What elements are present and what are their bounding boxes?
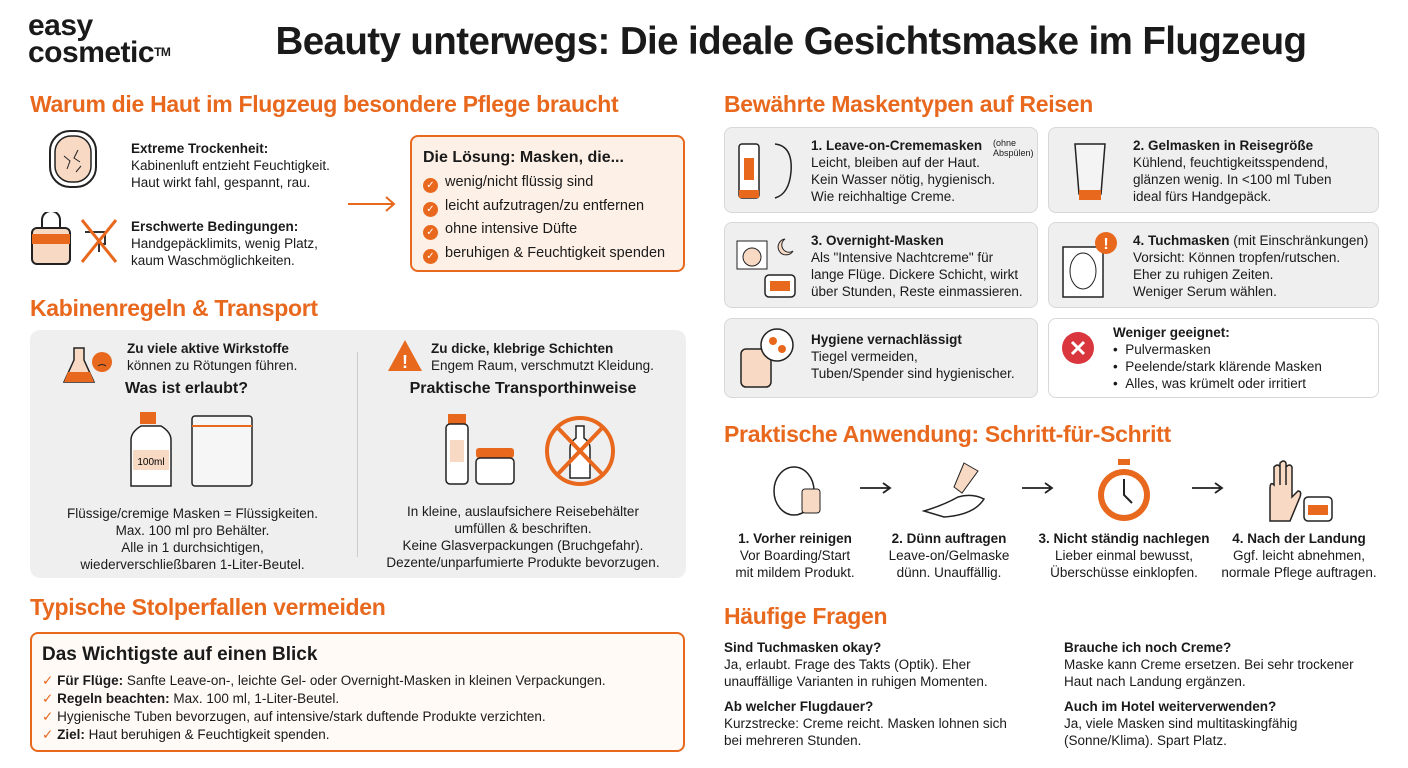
icon: timer: [1098, 459, 1150, 521]
solution list: wenig/nicht flüssig sind: [445, 174, 593, 190]
icon: bag and tap: [31, 212, 118, 265]
steps: 2. Dünn auftragen: [892, 531, 1006, 546]
solution list: ✓: [426, 227, 435, 238]
text: transport: [386, 504, 660, 570]
steps: Überschüsse einklopfen.: [1050, 565, 1198, 580]
icon: bottle and bag: [130, 412, 253, 487]
card: leave-on: Leicht, bleiben auf der Haut.: [811, 155, 980, 170]
card: overnight: Als "Intensive Nachtcreme" für: [811, 250, 993, 265]
card: sheet mask: Vorsicht: Können tropfen/rutschen.: [1133, 250, 1340, 265]
text: transport: Dezente/unparfumierte Produkte bevorzugen.: [386, 555, 660, 570]
icon: containers: [445, 414, 615, 486]
card: leave-on: Abspülen): [993, 148, 1034, 158]
steps: Lieber einmal bewusst,: [1055, 548, 1193, 563]
card: hygiene: Tuben/Spender sind hygienischer.: [811, 366, 1015, 381]
text: allowed: wiederverschließbaren 1-Liter-Beutel.: [80, 557, 305, 572]
logo: easy: [28, 9, 93, 42]
steps: 3. Nicht ständig nachlegen: [1038, 531, 1210, 546]
heading: why: Warum die Haut im Flugzeug besondere Pflege braucht: [30, 91, 618, 117]
card: sheet mask: Weniger Serum wählen.: [1133, 284, 1277, 299]
card: overnight: 3. Overnight-Masken: [811, 233, 944, 248]
heading: pitfalls: Typische Stolperfallen vermeiden: [30, 594, 386, 620]
steps: 4. Nach der Landung: [1232, 531, 1366, 546]
card: leave-on: Wie reichhaltige Creme.: [811, 189, 955, 204]
text: dryness: [131, 141, 330, 190]
FAQ: Kurzstrecke: Creme reicht. Masken lohnen sich: [724, 716, 1007, 731]
solution list: beruhigen & Feuchtigkeit spenden: [445, 244, 665, 260]
solution heading: Die Lösung: Masken, die...: [423, 149, 624, 166]
icon: hand cream: [1269, 460, 1333, 522]
icon: bottle and bag: 100ml: [137, 457, 165, 468]
arrow: [860, 482, 892, 494]
FAQ: Maske kann Creme ersetzen. Bei sehr trockener: [1064, 657, 1354, 672]
summary list: ✓ Hygienische Tuben bevorzugen, auf intensive/stark duftende Produkte verzichten.: [42, 709, 546, 724]
card: sheet mask: Eher zu ruhigen Zeiten.: [1133, 267, 1273, 282]
arrow: [1022, 482, 1054, 494]
card: gel: [1048, 127, 1379, 213]
FAQ: Ja, erlaubt. Frage des Takts (Optik). Eher: [724, 657, 971, 672]
steps: [735, 459, 1377, 580]
summary list: ✓ Ziel: Haut beruhigen & Feuchtigkeit spenden.: [42, 727, 330, 742]
card: leave-on: 1. Leave-on-Cremem­asken: [811, 138, 982, 153]
step texts: mit mildem Produkt.: [735, 565, 855, 580]
title: Beauty unterwegs: Die ideale Gesichtsmaske im Flugzeug: [276, 20, 1306, 63]
FAQ: Auch im Hotel weiterverwenden?: [1064, 699, 1276, 714]
arrow: [348, 196, 396, 212]
text: conditions: kaum Waschmöglichkeiten.: [131, 253, 295, 268]
FAQ: Brauche ich noch Creme?: [1064, 640, 1231, 655]
card: overnight: [724, 222, 1038, 308]
FAQ: Ab welcher Flugdauer?: [724, 699, 873, 714]
text: conditions: Handgepäcklimits, wenig Platz,: [131, 236, 318, 251]
steps: Ggf. leicht abnehmen,: [1233, 548, 1365, 563]
text: transport: umfüllen & beschriften.: [454, 521, 592, 536]
text: actives: [127, 341, 297, 373]
steps: Leave-on/Gelmaske: [889, 548, 1009, 563]
panel: solution: [410, 135, 685, 272]
text: actives: Zu viele aktive Wirkstoffe: [127, 341, 289, 356]
heading: rules: Kabinenregeln & Transport: [30, 295, 318, 321]
summary list: [42, 673, 606, 742]
card: gel: glänzen wenig. In <100 ml Tuben: [1133, 172, 1332, 187]
FAQ: [724, 640, 1354, 748]
card: less suitable: Weniger geeignet:: [1113, 325, 1230, 340]
text: transport: Keine Glasverpackungen (Bruchgefahr).: [403, 538, 643, 553]
icon: plane window: [49, 130, 97, 188]
text: dryness: Extreme Trockenheit:: [131, 141, 268, 156]
solution list: ✓: [426, 204, 435, 214]
icon: warning: [388, 340, 422, 372]
text: allowed: Alle in 1 durchsichtigen,: [121, 540, 264, 555]
card: leave-on: [724, 127, 1038, 213]
text: thick layers: Zu dicke, klebrige Schichten: [431, 341, 613, 356]
card: sheet mask: 4. Tuchmasken (mit Einschränkungen): [1133, 233, 1368, 248]
card: hygiene: Tiegel vermeiden,: [811, 349, 918, 364]
FAQ: unauffällige Varianten in ruhigen Momenten.: [724, 674, 988, 689]
card: leave-on: (ohne: [993, 138, 1016, 148]
card: less suitable: • Alles, was krümelt oder irritiert: [1113, 376, 1306, 391]
text: conditions: [131, 219, 318, 268]
card: hygiene: Hygiene vernachlässigt: [811, 332, 962, 347]
FAQ: Sind Tuchmasken okay?: [724, 640, 881, 655]
arrow: [1192, 482, 1224, 494]
summary list: ✓ Regeln beachten: Max. 100 ml, 1-Liter-Beutel.: [42, 691, 339, 706]
steps: normale Pflege auftragen.: [1221, 565, 1377, 580]
icon: cleansing: [773, 466, 820, 516]
FAQ: Ja, viele Masken sind multitaskingfähig: [1064, 716, 1297, 731]
logo: cosmeticTM: [28, 36, 170, 69]
subheading: transport: Praktische Transporthinweise: [410, 380, 636, 397]
text: allowed: [67, 506, 318, 572]
summary list: ✓ Für Flüge: Sanfte Leave-on-, leichte Gel- oder Overnight-Masken in kleinen Verpackungen.: [42, 673, 606, 688]
FAQ: bei mehreren Stunden.: [724, 733, 861, 748]
subheading: allowed: Was ist erlaubt?: [125, 380, 248, 397]
FAQ: (Sonne/Klima). Spart Platz.: [1064, 733, 1227, 748]
icon: apply: [922, 462, 985, 518]
text: actives: können zu Rötungen führen.: [127, 358, 297, 373]
heading: mask types: Bewährte Maskentypen auf Reisen: [724, 91, 1093, 117]
panel: rules: [30, 330, 686, 578]
step texts: 1. Vorher reinigen: [738, 531, 852, 546]
text: allowed: Max. 100 ml pro Behälter.: [116, 523, 269, 538]
heading: FAQ: Häufige Fragen: [724, 603, 887, 629]
FAQ: Haut nach Landung ergänzen.: [1064, 674, 1246, 689]
summary heading: Das Wichtigste auf einen Blick: [42, 644, 317, 665]
steps: dünn. Unauffällig.: [897, 565, 1001, 580]
step texts: [735, 531, 855, 580]
text: dryness: Kabinenluft entzieht Feuchtigkeit.: [131, 158, 330, 173]
step texts: Vor Boarding/Start: [740, 548, 850, 563]
card: hygiene: [724, 318, 1038, 398]
solution list: leicht aufzutragen/zu entfernen: [445, 198, 644, 214]
icon: flask: [62, 347, 112, 383]
card: sheet mask: [1048, 222, 1379, 308]
solution list: [423, 174, 665, 264]
card: sheet mask: !: [1103, 236, 1109, 253]
logo: [28, 9, 170, 69]
text: thick layers: Engem Raum, verschmutzt Kleidung.: [431, 358, 654, 373]
solution list: ✓: [426, 250, 435, 262]
text: conditions: Erschwerte Bedingungen:: [131, 219, 298, 234]
solution list: ohne intensive Düfte: [445, 221, 577, 237]
panel: summary: [30, 632, 685, 752]
card: gel: ideal fürs Handgepäck.: [1133, 189, 1271, 204]
solution list: ✓: [426, 180, 435, 191]
card: leave-on: Kein Wasser nötig, hygienisch.: [811, 172, 995, 187]
icon: warning: !: [402, 352, 408, 372]
card: gel: 2. Gelmasken in Reisegröße: [1133, 138, 1313, 153]
card: overnight: lange Flüge. Dickere Schicht, wirkt: [811, 267, 1018, 282]
card: less suitable: [1048, 318, 1379, 398]
heading: steps: Praktische Anwendung: Schritt-für-Schritt: [724, 421, 1171, 447]
card: gel: Kühlend, feuchtigkeitsspendend,: [1133, 155, 1328, 170]
card: overnight: über Stunden, Reste einmassieren.: [811, 284, 1023, 299]
text: dryness: Haut wirkt fahl, gespannt, rau.: [131, 175, 310, 190]
card: less suitable: • Peelende/stark klärende Masken: [1113, 359, 1322, 374]
text: thick layers: [431, 341, 654, 373]
text: allowed: Flüssige/cremige Masken = Flüssigkeiten.: [67, 506, 318, 521]
text: transport: In kleine, auslaufsichere Reisebehälter: [407, 504, 639, 519]
card: less suitable: • Pulvermasken: [1113, 342, 1211, 357]
